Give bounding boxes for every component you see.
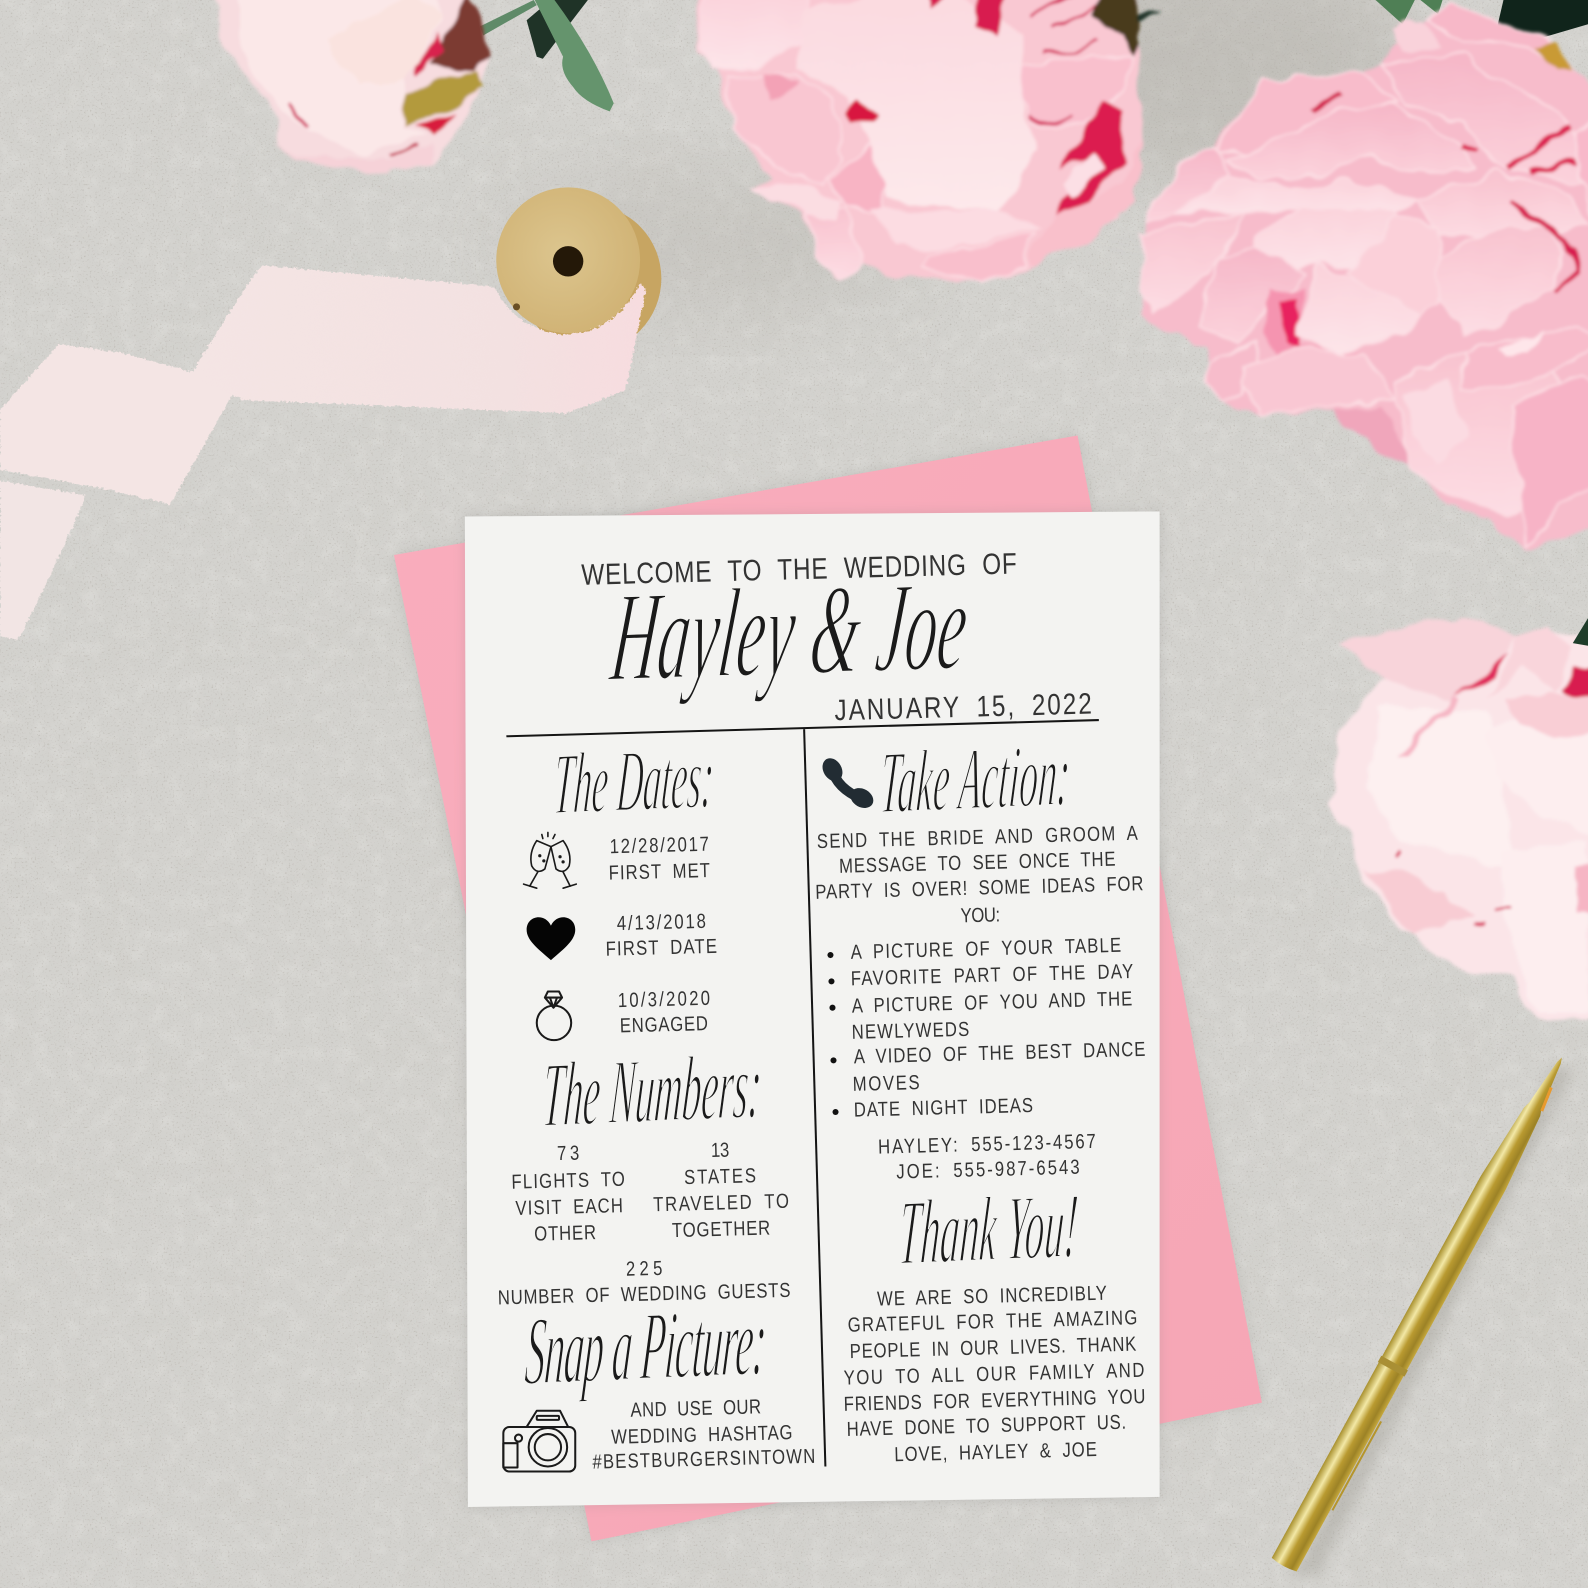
text: first met	[608, 832, 710, 884]
stat: 73 flights: FLIGHTS TO	[511, 1167, 625, 1193]
stat: 225 guests	[498, 1256, 791, 1309]
text: phone numbers: HAYLEY: 555-123-4567	[878, 1129, 1096, 1158]
text: thank you message: LOVE, HAYLEY & JOE	[894, 1437, 1097, 1466]
text: thank you message: YOU TO ALL OUR FAMILY AND	[843, 1358, 1145, 1389]
stat: 13 states: TOGETHER	[672, 1216, 770, 1241]
text: thank you message: HAVE DONE TO SUPPORT US.	[846, 1410, 1126, 1440]
text: thank you message: WE ARE SO INCREDIBLY	[877, 1281, 1108, 1310]
icon: diamond ring	[537, 991, 571, 1040]
section: thank you	[843, 1175, 1146, 1466]
text: hashtag: AND USE OUR	[630, 1395, 761, 1421]
list: ideas	[827, 933, 1146, 1121]
heading: the dates: The Dates:	[551, 728, 717, 833]
header: welcome line: WELCOME TO THE WEDDING OF	[581, 546, 1017, 591]
text: instructions: PARTY IS OVER! SOME IDEAS FOR	[815, 872, 1144, 903]
icon: heart	[527, 917, 575, 960]
icon: phone	[819, 755, 877, 812]
stat: 13 states: 13	[711, 1138, 729, 1161]
section: the numbers	[498, 1036, 791, 1309]
spool of ribbon	[496, 187, 661, 351]
text: phone numbers: JOE: 555-987-6543	[896, 1155, 1080, 1183]
title: couple names: Hayley & Joe	[604, 553, 975, 708]
flower: big peony top-right	[1140, 3, 1588, 555]
text: engaged: ENGAGED	[620, 1012, 708, 1037]
heading: snap a picture: Snap a Picture:	[522, 1287, 770, 1406]
ribbon: chiffon strip	[0, 265, 646, 640]
stat: 73 flights	[511, 1141, 625, 1245]
stat: 73 flights: VISIT EACH	[515, 1194, 623, 1219]
text: hashtag: WEDDING HASHTAG	[611, 1420, 793, 1448]
text: instructions: MESSAGE TO SEE ONCE THE	[839, 847, 1116, 877]
text: engaged	[617, 986, 710, 1037]
gold pen	[1270, 1050, 1576, 1578]
list: ideas: DATE NIGHT IDEAS	[853, 1093, 1033, 1121]
text: hashtag	[592, 1395, 816, 1473]
text: first date	[605, 909, 717, 960]
text: thank you message: FRIENDS FOR EVERYTHING YOU	[843, 1384, 1146, 1415]
icon: camera	[503, 1411, 575, 1472]
icon: champagne glasses	[524, 832, 576, 888]
text: instructions	[815, 821, 1144, 927]
heading: thank you: Thank You!	[896, 1175, 1081, 1285]
list: ideas: A VIDEO OF THE BEST DANCE	[854, 1037, 1146, 1068]
flower: large peony top-centre	[697, 0, 1165, 284]
text: thank you message	[843, 1281, 1146, 1466]
text: first date: FIRST DATE	[605, 934, 717, 960]
stat: 225 guests: 225	[626, 1256, 663, 1280]
text: instructions: SEND THE BRIDE AND GROOM A	[817, 821, 1139, 852]
panel: white program card	[465, 511, 1160, 1507]
list: ideas: MOVES	[852, 1071, 920, 1095]
list: ideas: NEWLYWEDS	[851, 1017, 969, 1043]
list: ideas: A PICTURE OF YOU AND THE	[851, 987, 1133, 1017]
leaf: stem beside right peony	[1573, 615, 1588, 646]
dividers: horizontal and vertical rules	[506, 720, 1099, 1466]
list: ideas: A PICTURE OF YOUR TABLE	[850, 933, 1121, 963]
text: first met: 12/28/2017	[609, 832, 709, 858]
section: take action	[815, 725, 1146, 1183]
flower: peony on the right edge	[1328, 617, 1588, 1020]
text: phone numbers	[878, 1129, 1096, 1183]
stat: 73 flights: 73	[557, 1141, 580, 1165]
text: instructions: YOU:	[960, 903, 1000, 927]
heading: the numbers: The Numbers:	[540, 1036, 765, 1147]
text: engaged: 10/3/2020	[617, 986, 710, 1012]
leaves: top-right stems	[1373, 0, 1588, 38]
stat: 13 states	[653, 1138, 789, 1241]
date: JANUARY 15, 2022	[834, 686, 1092, 727]
stat: 13 states: STATES	[684, 1164, 756, 1188]
text: first date: 4/13/2018	[616, 909, 706, 935]
section: snap a picture	[503, 1287, 816, 1473]
stat: 225 guests: NUMBER OF WEDDING GUESTS	[498, 1278, 791, 1309]
stat: 13 states: TRAVELED TO	[653, 1189, 789, 1216]
section: the dates	[524, 728, 717, 1040]
list: ideas: FAVORITE PART OF THE DAY	[850, 959, 1134, 990]
heading: take action: Take Action:	[878, 725, 1073, 832]
flower: small peony top-left	[214, 0, 490, 175]
envelope: pink	[394, 435, 1262, 1541]
text: thank you message: GRATEFUL FOR THE AMAZING	[847, 1306, 1138, 1336]
text: hashtag: #BESTBURGERSINTOWN	[592, 1444, 816, 1473]
text: first met: FIRST MET	[608, 858, 710, 884]
leaves: top-left stems	[480, 0, 614, 111]
stat: 73 flights: OTHER	[534, 1220, 596, 1245]
text: thank you message: PEOPLE IN OUR LIVES. THANK	[849, 1332, 1137, 1362]
